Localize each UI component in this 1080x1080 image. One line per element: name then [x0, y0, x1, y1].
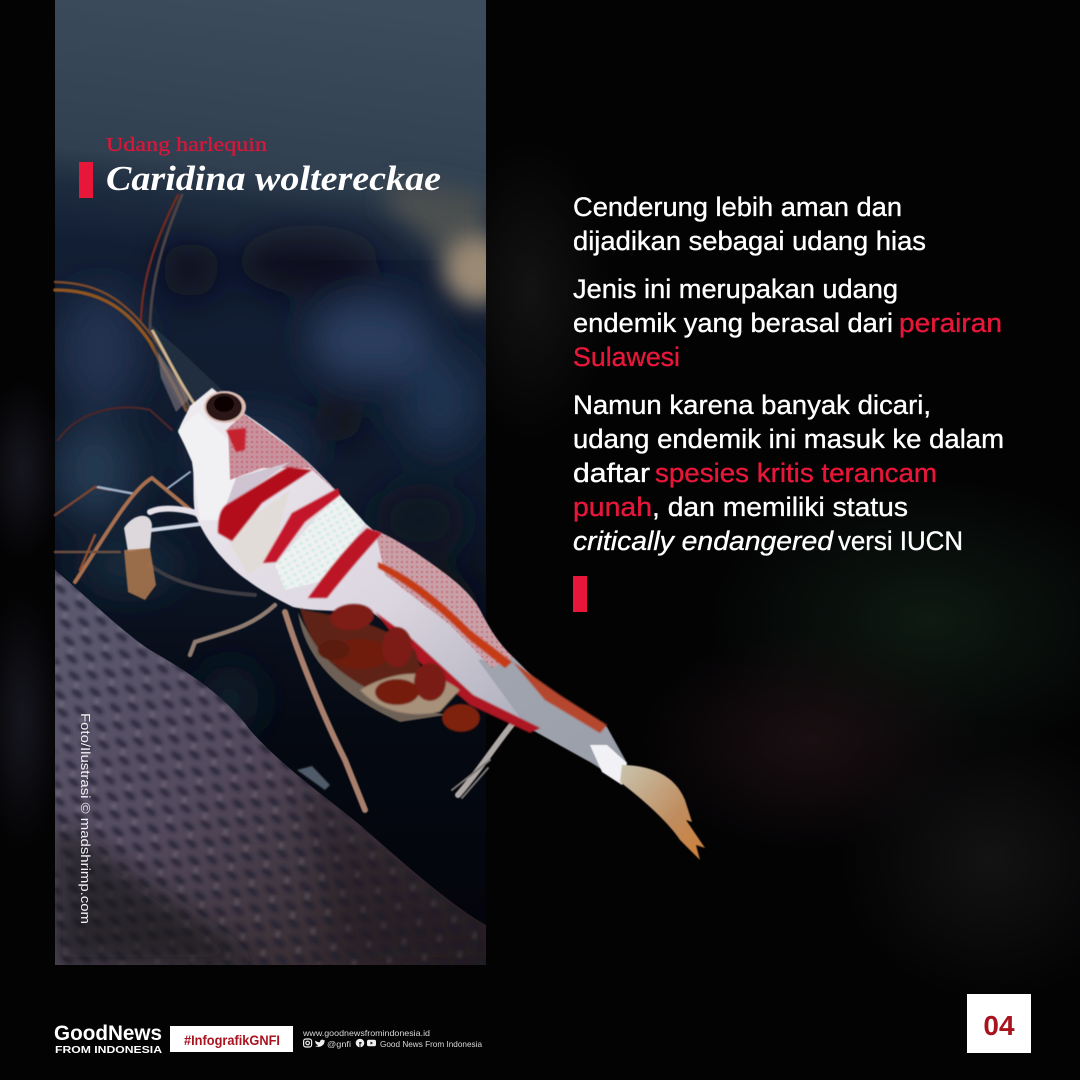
hashtag badge [170, 1026, 293, 1052]
text block: udang endemik ini masuk ke dalam [573, 424, 1004, 454]
common name: Udang harlequin [106, 134, 267, 156]
eye [204, 391, 246, 423]
icon: instagram [304, 1039, 312, 1047]
eggs [300, 602, 480, 732]
red bands [218, 428, 607, 733]
text block: punah [573, 492, 652, 522]
icon: youtube [367, 1040, 376, 1046]
front claw mass [124, 516, 152, 552]
text block: daftar [573, 458, 650, 488]
tail section grey [478, 657, 622, 772]
water blotches [55, 225, 480, 736]
head white [178, 412, 240, 520]
rock [55, 560, 486, 965]
photo credit: Foto/Ilustrasi © madshrimp.com [78, 713, 93, 924]
page number: 04 [983, 1010, 1015, 1041]
text block [573, 192, 1004, 556]
species name: Caridina woltereckae [106, 159, 441, 198]
text block: endemik yang berasal dari [573, 308, 893, 338]
footer logo: GoodNews [54, 1022, 162, 1056]
rostrum carapace spine [148, 322, 245, 418]
shrimp [55, 195, 705, 860]
text block: Jenis ini merupakan udang [573, 274, 898, 304]
body [178, 388, 627, 785]
back dorsal pink [375, 530, 513, 668]
photo panel [55, 0, 512, 965]
tan blob [379, 177, 486, 270]
social links: @gnfi [327, 1039, 351, 1049]
text block: Namun karena banyak dicari, [573, 390, 931, 420]
social links: Good News From Indonesia [380, 1039, 482, 1049]
front legs [55, 472, 514, 810]
text block: spesies kritis terancam [655, 458, 937, 488]
text block: perairan [899, 308, 1002, 338]
white cell patch [275, 493, 365, 590]
pleopod fringe under body [298, 612, 465, 722]
icon: facebook [356, 1039, 364, 1047]
antennae [55, 195, 190, 440]
text block: , dan memiliki status [652, 492, 908, 522]
icon: twitter [315, 1040, 325, 1047]
social links: www.goodnewsfromindonesia.id [302, 1028, 430, 1038]
hashtag badge: #InfografikGNFI [184, 1033, 280, 1048]
text block: Sulawesi [573, 342, 680, 372]
text block: critically endangered [573, 526, 834, 556]
social links [302, 1028, 482, 1049]
page number [967, 994, 1031, 1053]
small creature on rock [297, 766, 330, 790]
footer logo: GoodNews: FROM INDONESIA [55, 1044, 162, 1056]
species accent bar [79, 162, 93, 198]
red accent bar [573, 576, 587, 612]
text block: versi IUCN [838, 526, 963, 556]
carapace pinkish upper [228, 414, 338, 493]
tail fan [590, 745, 705, 860]
footer logo: GoodNews: GoodNews [54, 1022, 162, 1045]
slate top haze [55, 0, 486, 260]
midsection [228, 490, 290, 575]
heading [79, 134, 441, 198]
text block: Cenderung lebih aman dan [573, 192, 902, 222]
text block: dijadikan sebagai udang hias [573, 226, 926, 256]
